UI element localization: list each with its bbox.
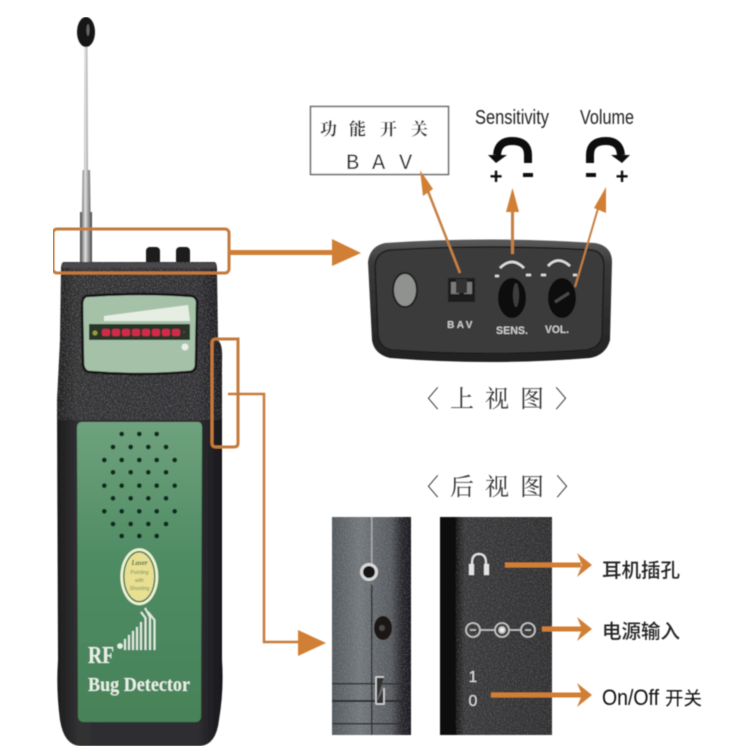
device body bbox=[55, 260, 225, 746]
arrow: on/off label bbox=[491, 683, 592, 707]
label: 0: 0 bbox=[469, 693, 478, 710]
badge: with bbox=[135, 578, 144, 584]
power button bbox=[393, 273, 417, 307]
slide switch bbox=[376, 677, 384, 704]
label: on/off switch bbox=[602, 685, 702, 711]
sensitivity knob bbox=[498, 278, 526, 318]
arrow: sensitivity knob to label bbox=[506, 188, 519, 254]
LED bar bbox=[89, 324, 190, 340]
badge: Shooting bbox=[130, 586, 150, 592]
caption: rear view: 〈后视图〉 bbox=[415, 467, 580, 502]
BAV switch bbox=[448, 278, 475, 302]
arrow: headphone jack label bbox=[505, 553, 592, 577]
RF label: RF bbox=[88, 643, 114, 669]
antenna bbox=[77, 17, 95, 262]
arrow: BAV switch to label bbox=[420, 170, 460, 273]
badge bbox=[120, 548, 158, 605]
panel: top view of device: VOL. bbox=[545, 324, 569, 336]
icon: sensitivity rotation arrow bbox=[488, 141, 533, 189]
arrow: power input label bbox=[542, 617, 592, 641]
headphone jack bbox=[360, 563, 378, 581]
volume dial mark bbox=[541, 260, 577, 275]
device: RF bug detector bbox=[55, 17, 225, 746]
arrow: to rear view bbox=[228, 394, 326, 656]
label: headphone jack: 耳机插孔 bbox=[602, 554, 680, 583]
label box: function switch: 能 bbox=[349, 115, 366, 140]
knobs bbox=[146, 247, 190, 265]
signal waves icon bbox=[117, 608, 154, 650]
volume knob bbox=[548, 278, 576, 318]
label: 1: 1 bbox=[469, 669, 478, 686]
label: power input: 电源输入 bbox=[602, 615, 680, 644]
label: Volume: Volume bbox=[580, 107, 634, 129]
sensitivity dial mark bbox=[495, 262, 531, 276]
badge: Laser bbox=[130, 559, 148, 567]
arrow: to top view bbox=[229, 239, 361, 266]
highlight box: side edge bbox=[212, 339, 238, 447]
speaker holes bbox=[102, 432, 177, 538]
label box: function switch bbox=[310, 106, 448, 176]
panel: rear photo left bbox=[332, 517, 411, 735]
Bug Detector label: Bug Detector bbox=[88, 674, 190, 696]
highlight box: top edge bbox=[53, 229, 229, 273]
label box: function switch: V bbox=[399, 151, 413, 176]
panel: top view of device: BAV bbox=[447, 320, 475, 331]
arrow: volume knob to label bbox=[575, 187, 606, 287]
power socket bbox=[374, 616, 392, 640]
label box: function switch: 开 bbox=[380, 115, 397, 140]
icon: volume rotation arrow bbox=[586, 141, 630, 189]
icon: volume rotation arrow: + bbox=[616, 164, 628, 189]
icon: headphones bbox=[470, 554, 488, 574]
label box: function switch: B bbox=[346, 151, 359, 176]
label box: function switch: A bbox=[372, 151, 386, 176]
green front panel bbox=[77, 422, 202, 722]
label: Sensitivity: Sensitivity bbox=[475, 107, 549, 129]
label box: function switch: 关 bbox=[411, 115, 428, 140]
icon: sensitivity rotation arrow: + bbox=[490, 164, 502, 189]
panel: top view of device bbox=[368, 240, 612, 362]
label box: function switch: 功 bbox=[320, 115, 337, 140]
badge: Pointing bbox=[130, 570, 149, 576]
icon: power polarity bbox=[466, 623, 535, 637]
label: on/off switch: On/Off bbox=[602, 685, 660, 710]
caption: top view: 〈上视图〉 bbox=[415, 379, 579, 414]
label: on/off switch: 开关 bbox=[665, 685, 702, 711]
panel: rear photo right bbox=[440, 517, 552, 735]
panel: top view of device: SENS. bbox=[496, 325, 528, 337]
display panel bbox=[82, 294, 197, 374]
